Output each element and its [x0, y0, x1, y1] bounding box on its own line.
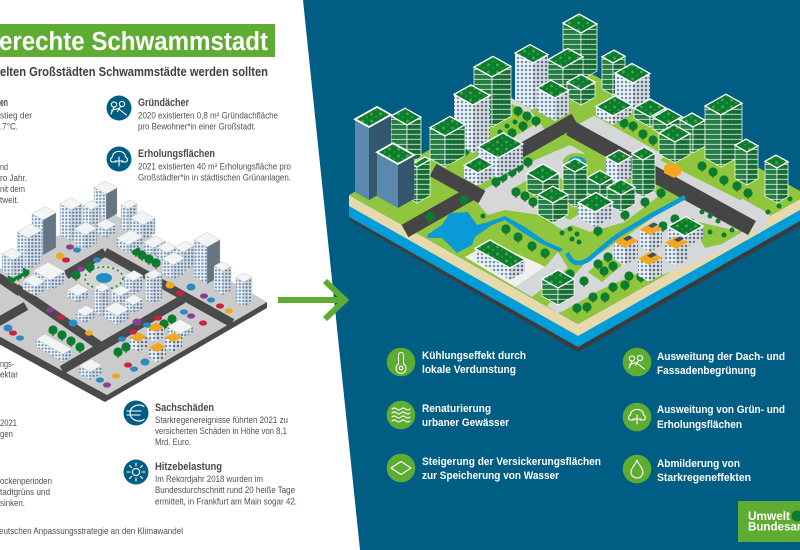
- fact: Sachschäden: Mrd. Euro.: [155, 437, 191, 447]
- cars: [4, 244, 233, 388]
- text block: cropped sector fact: ektar: [0, 370, 18, 380]
- benefit: cooling: Kühlungseffekt durch: [422, 350, 526, 362]
- text block: cropped drought fact: tadtgrüns und: [0, 487, 50, 497]
- benefit: cooling: [387, 348, 526, 376]
- benefit: cooling: lokale Verdunstung: [422, 364, 516, 376]
- text block: cropped 2021 fact: [0, 418, 17, 439]
- text block: cropped temperature fact: .7°C.: [0, 122, 18, 132]
- text block: cropped drought fact: ockenperioden: [0, 476, 52, 486]
- buildings: [2, 181, 252, 380]
- benefit: heavy rain mitigation: Starkregeneffekten: [657, 472, 751, 484]
- benefit: green roofs: Ausweitung der Dach- und: [657, 351, 785, 363]
- fact: Sachschäden: Starkregenereignisse führten 2021 zu: [155, 415, 288, 425]
- fact: Hitzebelastung: Hitzebelastung: [155, 461, 222, 473]
- trees and bushes: [425, 106, 792, 314]
- trees: [7, 246, 177, 358]
- platform layers: [349, 66, 800, 352]
- text block: cropped sector fact: ngs-: [0, 359, 14, 369]
- paved areas: [465, 100, 765, 313]
- text block: cropped 2021 fact: 2021: [0, 418, 17, 428]
- fact: Erholungsflächen: Großstädter*in in städtischen Grünanlagen.: [138, 172, 291, 182]
- benefit: green spaces: [623, 403, 785, 431]
- illustration: green sponge city: [349, 14, 800, 352]
- text block: cropped rainfall fact: [0, 162, 27, 205]
- benefit: infiltration: zur Speicherung von Wasser: [422, 470, 560, 482]
- text block: cropped rainfall fact: tweit.: [0, 195, 19, 205]
- benefit: renaturation: [387, 401, 510, 429]
- title banner: erechte Schwammstadt: [0, 28, 268, 56]
- fact: Gründächer: pro Bewohner*in einer Großstadt.: [138, 122, 256, 132]
- green patches: [478, 95, 770, 316]
- text block: cropped drought fact: [0, 476, 52, 508]
- fact: Erholungsflächen: [106, 146, 291, 182]
- panel: white left panel: [0, 0, 360, 550]
- text block: cropped drought fact: sinken.: [0, 498, 25, 508]
- text block: cropped 2021 fact: gen: [0, 429, 13, 439]
- roads: [405, 120, 752, 231]
- fact: Hitzebelastung: Im Rekordjahr 2018 wurden im: [155, 474, 263, 484]
- benefit: infiltration: Steigerung der Versickerungsflächen: [422, 456, 601, 468]
- text block: cropped temperature fact: [0, 97, 32, 132]
- fountain: [563, 153, 591, 171]
- fact: Gründächer: 2020 existierten 0,8 m² Gründachfläche: [138, 111, 278, 121]
- benefit: heavy rain mitigation: [623, 455, 751, 484]
- text block: cropped rainfall fact: ro Jahr.: [0, 173, 27, 183]
- solar-roof houses: [614, 222, 688, 282]
- arrow: [278, 281, 345, 319]
- subtitle: elten Großstädten Schwammstädte werden sollten: [0, 65, 268, 79]
- illustration: grey conventional city: [0, 181, 267, 402]
- delivery van: [664, 162, 681, 178]
- benefit: infiltration: [387, 454, 601, 482]
- water: lake and river: [427, 197, 685, 263]
- fact: Gründächer: Gründächer: [138, 97, 190, 109]
- text block: cropped rainfall fact: nit dem: [0, 184, 25, 194]
- fact: Sachschäden: versicherten Schäden in Höhe von 8,1: [155, 426, 287, 436]
- source note: eutschen Anpassungsstrategie an den Klimawandel: [0, 526, 183, 536]
- logo: Umweltbundesamt: Umwelt: [748, 511, 790, 523]
- fact: Hitzebelastung: Bundesdurchschnitt rund 20 heiße Tage: [155, 485, 295, 495]
- benefit: green spaces: Erholungsflächen: [657, 419, 742, 431]
- fact: Erholungsflächen: Erholungsflächen: [138, 148, 215, 160]
- benefit: renaturation: Renaturierung: [422, 403, 491, 415]
- text block: cropped temperature fact: en: [0, 97, 8, 109]
- benefit: renaturation: urbaner Gewässer: [422, 417, 510, 429]
- text block: cropped rainfall fact: nd: [0, 162, 8, 172]
- benefit: green roofs: [623, 348, 785, 377]
- logo: Umweltbundesamt: [738, 501, 800, 542]
- platform: [0, 209, 267, 402]
- fountain plaza: [80, 265, 128, 291]
- fact: Sachschäden: [124, 400, 288, 447]
- text block: cropped sector fact: [0, 359, 18, 380]
- roads: [0, 252, 232, 398]
- fact: Hitzebelastung: [124, 460, 297, 506]
- benefit: green roofs: Fassadenbegrünung: [657, 365, 756, 377]
- fact: Gründächer: [106, 96, 278, 132]
- benefit: heavy rain mitigation: Abmilderung von: [657, 458, 740, 470]
- fact: Sachschäden: Sachschäden: [155, 402, 214, 414]
- green-roofed buildings: [355, 14, 788, 305]
- text block: cropped temperature fact: stieg der: [0, 110, 32, 120]
- fact: Erholungsflächen: 2021 existierten 40 m² Erholungsfläche pro: [138, 162, 291, 172]
- benefit: green spaces: Ausweitung von Grün- und: [657, 404, 785, 416]
- fact: Hitzebelastung: ermittelt, in Frankfurt am Main sogar 42.: [155, 496, 297, 506]
